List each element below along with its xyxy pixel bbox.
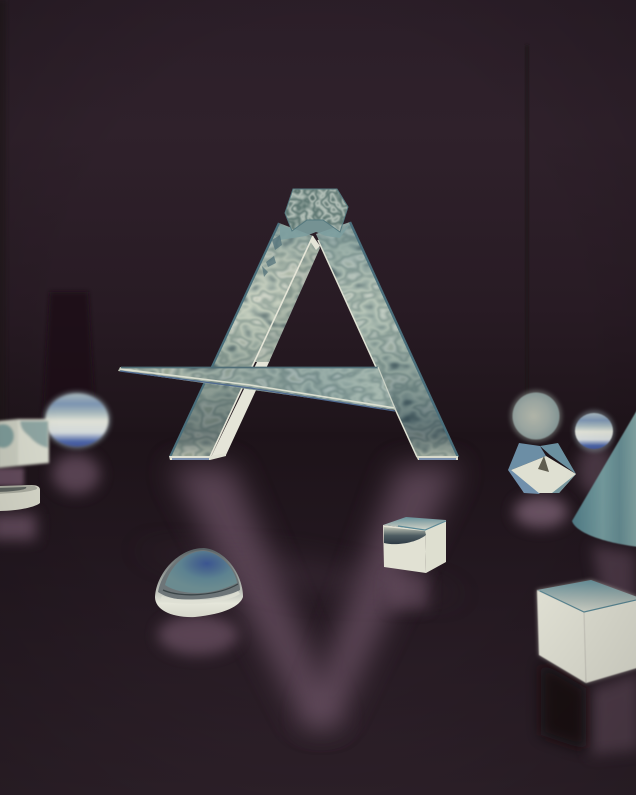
object: ring [0,485,40,511]
sphere glow [510,390,562,442]
A: right leg inner edge [318,240,417,457]
cube left face [383,525,426,573]
object: cone [572,405,636,547]
wall shadow: left object [42,292,96,432]
reflection: A crossbar [130,548,470,596]
reflection: cone [592,545,636,630]
reflection: left sphere [52,454,100,494]
object: right sphere large [510,390,562,442]
A: crossbar right edge [378,367,396,411]
object: middle cube [383,517,446,573]
A: crossbar blue underside [120,371,395,411]
A: left leg inner edge highlight [210,236,313,457]
ring side [0,485,40,511]
reflection: ring [0,514,36,540]
reflection: A right leg [304,466,460,725]
polyhedron left top facet [508,443,546,470]
sphere body [575,413,613,449]
wall shadow: left edge [0,0,6,430]
A: left leg hammered face [170,223,313,457]
polyhedron lower body [511,456,576,493]
object: right sphere small [573,410,615,452]
drop base [155,548,243,617]
A: left leg shading [170,223,313,457]
wall corner shadow line [525,45,529,430]
A: shoulder band [280,219,350,240]
reflection: right sphere [578,444,614,496]
reflection: left cube and ring [0,468,24,486]
shadow: big cube [541,662,586,750]
polyhedron inner reflection [538,456,549,472]
drop dome [165,551,237,593]
cube top edge [540,591,636,612]
A: right foot [416,456,458,460]
reflection: drop [158,615,238,655]
A: left foot [169,453,226,460]
object: drop [155,548,243,617]
drop highlight [160,591,240,604]
reflection: big cube [590,672,636,755]
A: crossbar [118,367,395,410]
letter A [118,189,458,460]
object: polyhedron [508,443,576,494]
sphere body [512,392,560,440]
polyhedron lower right facet [552,474,576,493]
reflection: A left leg [170,466,340,725]
cube right face [425,520,446,573]
ring top [0,485,37,494]
A: crossbar cream edge [120,369,395,408]
cube face left [0,419,18,468]
floor reflections [0,444,636,755]
A: right leg outer edge [350,222,458,457]
A: right foot blue line [419,458,456,460]
A: right leg shading [316,222,458,457]
background wall [0,0,636,436]
A: left foot blue line [172,458,209,460]
cube top face [383,517,446,530]
A: apex cap [285,189,348,232]
A: apex cap outline [285,189,348,232]
A: right leg hammered face [316,222,458,457]
cube swirl left [0,424,14,448]
A: crossbar top edge [121,366,378,368]
background floor [0,432,636,795]
cube face right [18,419,49,466]
cube left face [537,590,586,683]
drop rim [158,550,240,600]
A: left leg blue edge [170,223,279,457]
sphere glow [573,410,615,452]
polyhedron lower left facet [508,470,540,494]
A: left leg white side [210,360,270,459]
object: big cube [537,580,636,683]
sphere glow [43,391,111,449]
ring inner [0,487,26,492]
drop dark rim line [163,584,238,595]
reflection: polyhedron [514,496,568,528]
object: left cube [0,419,49,468]
cube swirl right [20,421,48,448]
cube top face [537,580,636,612]
cube right face [584,598,636,683]
polyhedron right top facet [540,443,576,474]
cube glow [537,580,636,683]
object: left sphere [43,391,111,449]
sphere body [46,394,108,446]
A: left leg upper side, textured [255,236,320,362]
cube dark reflection [384,527,426,544]
A: apex notch highlight [310,236,320,250]
cone body [572,405,636,547]
A: upper left leg dents [262,235,282,277]
reflection: middle cube [388,575,428,609]
cube blue edge [398,521,446,530]
